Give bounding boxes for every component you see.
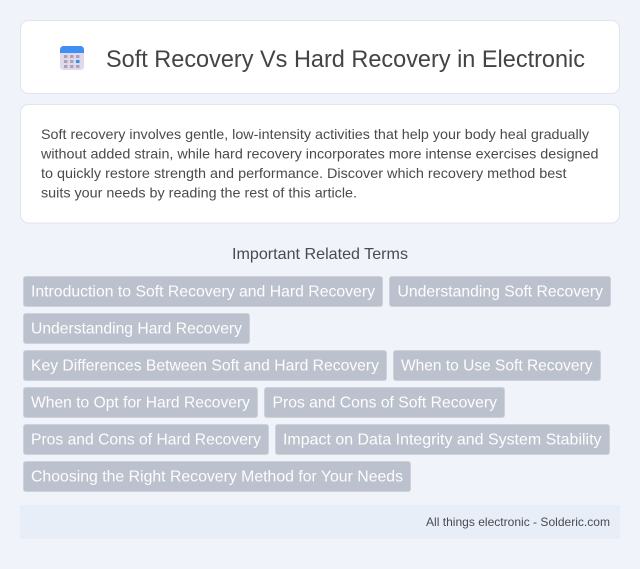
tag: when to use soft recovery: When to Use Soft Recovery	[401, 358, 592, 375]
tag: key differences: Key Differences Between Soft and Hard Recovery	[31, 358, 379, 375]
title: Soft Recovery Vs Hard Recovery in Electronic	[106, 46, 585, 73]
tag: pros and cons of hard recovery: Pros and Cons of Hard Recovery	[31, 432, 261, 449]
tag: when to use soft recovery	[394, 350, 600, 380]
panel: intro text card	[20, 104, 620, 223]
tag: understanding hard recovery: Understanding Hard Recovery	[31, 321, 242, 338]
text block: introduction: without added strain, while hard recovery incorporates more intense exercises designed	[40, 146, 599, 162]
footer: All things electronic - Solderic.com	[426, 515, 610, 529]
tag: when to opt for hard recovery: When to Opt for Hard Recovery	[31, 395, 250, 412]
tag: pros and cons of soft recovery	[264, 388, 504, 418]
tag: understanding hard recovery	[24, 314, 250, 344]
tag: impact on data integrity	[276, 424, 610, 454]
tag: choosing the right method	[24, 462, 410, 492]
tag: introduction	[24, 276, 382, 306]
tag list: related terms	[24, 276, 610, 492]
text block: introduction: suits your needs by reading the rest of this article.	[41, 185, 357, 201]
text block: introduction: Soft recovery involves gentle, low-intensity activities that help your body heal gradually	[41, 126, 589, 142]
text block: introduction	[40, 126, 599, 201]
footer	[20, 505, 620, 539]
tag: pros and cons of hard recovery	[24, 424, 268, 454]
tag: introduction: Introduction to Soft Recovery and Hard Recovery	[31, 284, 375, 301]
heading: related terms: Important Related Terms	[232, 246, 408, 263]
tag: choosing the right method: Choosing the Right Recovery Method for Your Needs	[31, 469, 403, 486]
tag: when to opt for hard recovery	[24, 388, 258, 418]
tag: understanding soft recovery	[390, 276, 610, 306]
tag: understanding soft recovery: Understanding Soft Recovery	[398, 284, 603, 301]
tag: pros and cons of soft recovery: Pros and Cons of Soft Recovery	[272, 395, 497, 412]
tag: impact on data integrity: Impact on Data Integrity and System Stability	[283, 432, 602, 449]
text block: introduction: to quickly restore strength and performance. Discover which recovery method best	[41, 165, 567, 181]
tag: key differences	[24, 350, 386, 380]
panel: title card	[20, 20, 620, 94]
icon: calendar	[60, 46, 84, 70]
